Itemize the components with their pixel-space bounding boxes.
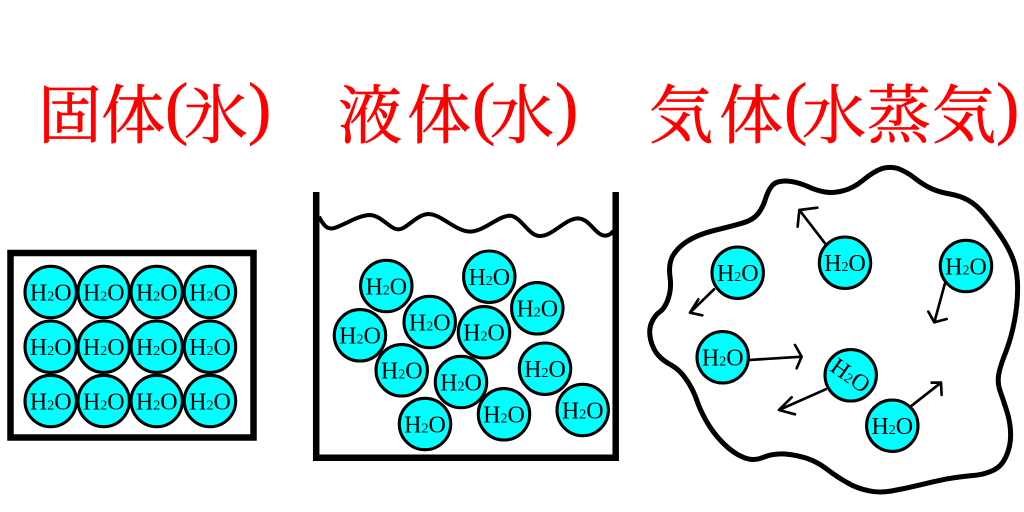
liquid molecules: H2O: [463, 320, 505, 346]
title: liquid (water): 体: [407, 81, 471, 152]
liquid molecules: H2O: [404, 412, 446, 438]
gas molecules: H2O: [702, 346, 744, 372]
ice container frame: [10, 253, 254, 438]
liquid molecules: H2O: [516, 296, 558, 322]
motion arrows: [690, 208, 947, 414]
solid molecules grid: H2O: [136, 280, 178, 306]
panel: liquid: [316, 192, 616, 458]
title: solid (ice): [38, 70, 271, 152]
solid molecules grid: H2O: [189, 280, 231, 306]
title: solid (ice): ): [248, 70, 271, 147]
solid molecules grid: H2O: [30, 390, 72, 416]
title: solid (ice): 体: [101, 81, 165, 152]
solid molecules grid: H2O: [83, 280, 125, 306]
solid molecules grid: [25, 266, 236, 427]
liquid molecules: H2O: [440, 370, 482, 396]
liquid molecules: H2O: [381, 358, 423, 384]
solid molecules grid: H2O: [30, 335, 72, 361]
liquid molecules: H2O: [468, 265, 510, 291]
title: gas (water vapour): 水: [802, 81, 866, 152]
gas molecules: H2O: [825, 354, 875, 399]
solid molecules grid: H2O: [30, 280, 72, 306]
gas molecules: H2O: [945, 254, 987, 280]
panel: gas: [650, 167, 1018, 492]
title: liquid (water): ): [555, 70, 578, 147]
solid molecules grid: H2O: [189, 335, 231, 361]
gas molecules: H2O: [824, 251, 866, 277]
gas molecules: H2O: [717, 261, 759, 287]
title: gas (water vapour): 気: [932, 81, 996, 152]
gas molecules: H2O: [871, 414, 913, 440]
liquid molecules: H2O: [524, 357, 566, 383]
solid molecules grid: H2O: [136, 390, 178, 416]
panel: solid: [10, 253, 254, 438]
liquid molecules: H2O: [365, 274, 407, 300]
title: solid (ice): (: [165, 70, 188, 147]
liquid molecules: H2O: [339, 324, 381, 350]
liquid molecules: H2O: [409, 310, 451, 336]
solid molecules grid: H2O: [83, 390, 125, 416]
title: gas (water vapour): (: [784, 70, 807, 147]
gas boundary outline: [650, 167, 1018, 492]
title: liquid (water): [338, 70, 578, 152]
solid molecules grid: H2O: [189, 390, 231, 416]
solid molecules grid: H2O: [136, 335, 178, 361]
title: liquid (water): 液: [338, 81, 402, 152]
title: liquid (water): (: [472, 70, 495, 147]
title: gas (water vapour): ): [996, 70, 1019, 147]
solid molecules grid: H2O: [83, 335, 125, 361]
title: liquid (water): 水: [490, 81, 554, 152]
title: gas (water vapour): [649, 70, 1019, 152]
title: solid (ice): 氷: [184, 81, 248, 152]
water surface: [319, 214, 613, 236]
liquid molecules: H2O: [562, 398, 604, 424]
title: gas (water vapour): 蒸: [867, 81, 931, 152]
title: gas (water vapour): 気: [649, 81, 713, 152]
title: gas (water vapour): 体: [719, 81, 783, 152]
gas molecules: [697, 237, 992, 451]
liquid molecules: [334, 251, 608, 450]
title: solid (ice): 固: [38, 81, 102, 152]
beaker walls: [316, 192, 616, 458]
liquid molecules: H2O: [483, 402, 525, 428]
